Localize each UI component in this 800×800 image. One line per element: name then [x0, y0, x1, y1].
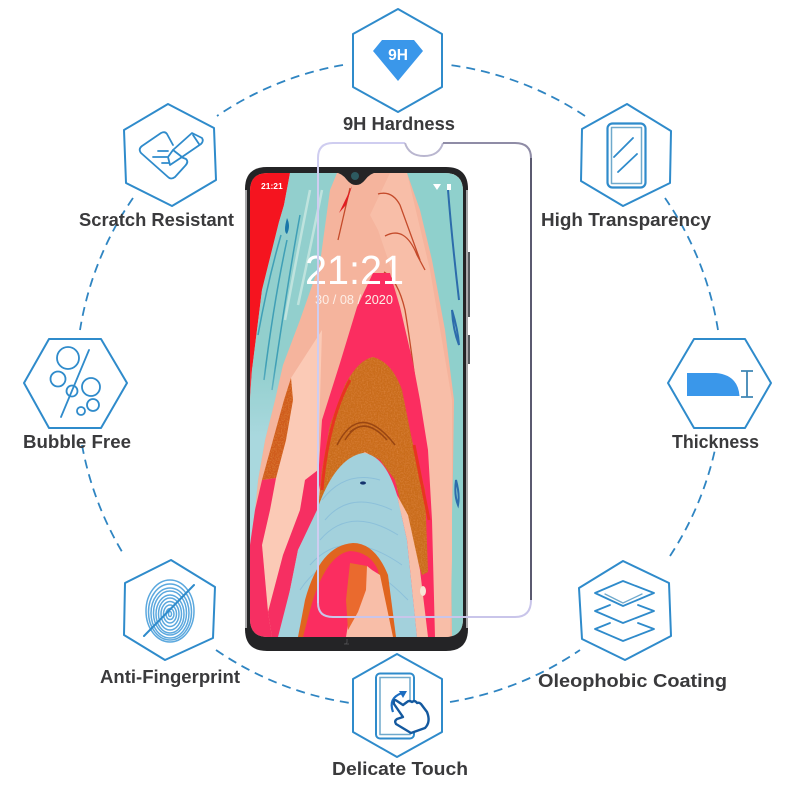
teal band streaks — [258, 215, 300, 390]
icon: hand touching screen — [376, 674, 429, 738]
hexagon frame — [668, 339, 771, 428]
inner pink arch — [303, 551, 378, 637]
icon: glass edge profile — [687, 371, 753, 397]
lock screen date: 30 / 08 / 2020 — [315, 292, 393, 307]
label: Thickness — [672, 432, 759, 452]
feature: delicate touch — [332, 654, 468, 779]
hexagon frame — [24, 339, 127, 428]
pink beside tongue — [268, 470, 318, 637]
label: Oleophobic Coating — [538, 671, 727, 691]
blue arch — [278, 453, 417, 637]
side buttons — [467, 252, 470, 364]
orange edge on gold — [322, 380, 429, 520]
darker swirl in gold — [337, 422, 395, 445]
central pink triangle — [318, 273, 435, 637]
red left region — [250, 173, 290, 400]
inner peach blob — [346, 566, 393, 637]
feature: thickness — [668, 339, 771, 452]
glass protector outline — [318, 143, 531, 617]
left lower gold stripe — [262, 378, 293, 480]
hexagon frame — [124, 104, 216, 206]
peach strip right of arch — [397, 495, 428, 637]
lock screen clock: 21:21 — [305, 247, 404, 293]
lower teal tint — [250, 368, 276, 544]
feature: bubble free — [23, 339, 131, 452]
hexagon frame — [353, 9, 442, 112]
screen artwork — [250, 173, 463, 637]
icon: 9H diamond: 9H — [388, 47, 408, 64]
label: High Transparency — [541, 210, 711, 230]
icon: coating layers — [595, 581, 654, 641]
label: 9H Hardness — [343, 114, 455, 134]
hexagon frame — [353, 654, 442, 757]
feature: high transparency — [541, 104, 711, 230]
label: Anti-Fingerprint — [100, 667, 240, 687]
hexagon frame — [124, 560, 215, 660]
label: Bubble Free — [23, 432, 131, 452]
icon: crossed fingerprint — [144, 580, 194, 642]
teardrop notch — [334, 172, 378, 185]
inner orange arch — [298, 543, 396, 637]
icon: scratched card and pen — [140, 132, 203, 178]
home indicator — [344, 639, 349, 644]
feature: anti-fingerprint — [100, 560, 240, 687]
phone — [245, 167, 470, 651]
label: Scratch Resistant — [79, 210, 234, 230]
feature: oleophobic coating — [538, 561, 727, 691]
teal band — [250, 173, 337, 545]
hexagon frame — [579, 561, 671, 660]
label: Delicate Touch — [332, 759, 468, 779]
feature: scratch resistant — [79, 104, 234, 230]
left pink region — [250, 478, 276, 637]
icon: crossed bubbles — [50, 347, 100, 417]
central peach fold lines — [338, 188, 425, 380]
hexagon frame — [581, 104, 671, 206]
lighter peach stripes — [370, 173, 452, 637]
dashed ring connecting features — [80, 65, 718, 703]
feature: 9H hardness — [343, 9, 455, 134]
phone body — [245, 167, 468, 651]
icon: glass panel — [608, 124, 646, 188]
right teal band — [407, 173, 463, 637]
status icons — [433, 184, 451, 190]
left long peach tongue — [262, 330, 322, 612]
gold glitter — [318, 357, 428, 575]
status bar time: 21:21 — [261, 181, 283, 191]
